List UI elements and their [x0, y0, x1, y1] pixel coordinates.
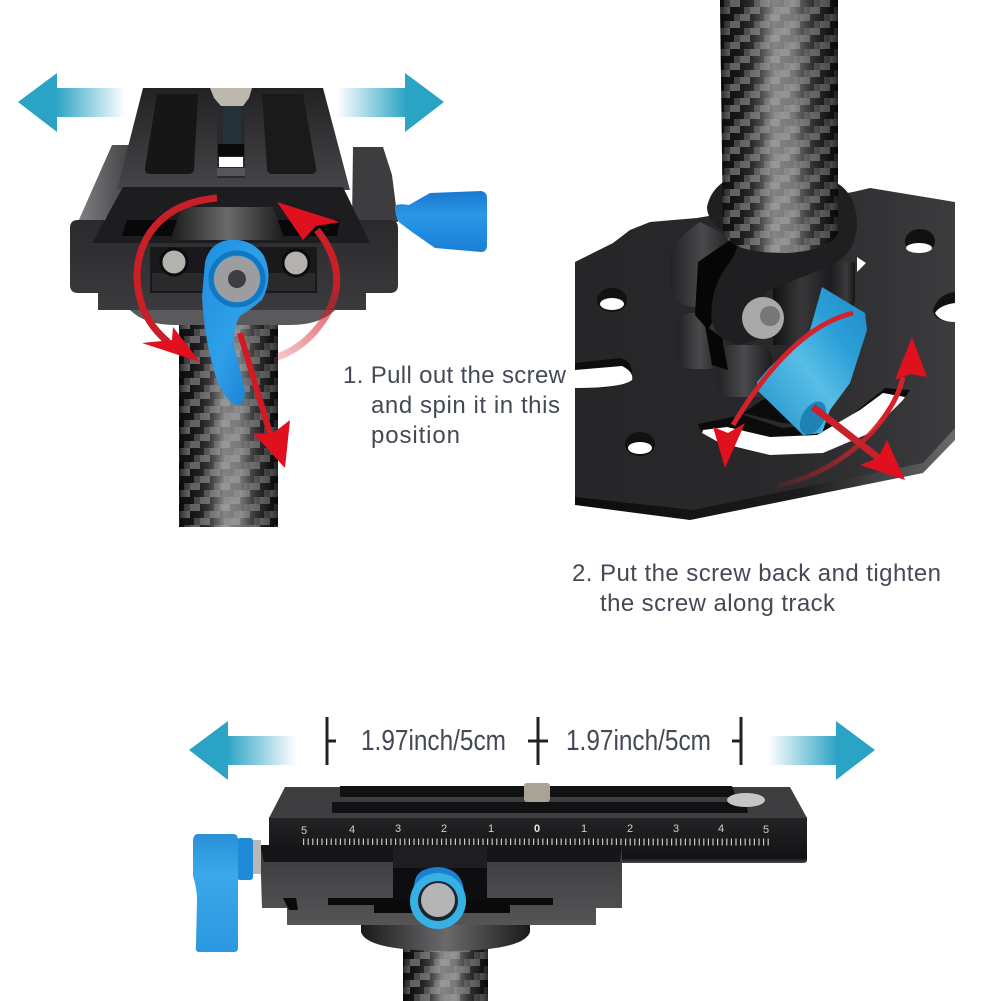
text: step 2: 2. Put the screw back and tighten	[572, 560, 941, 587]
rubber strips	[332, 786, 748, 813]
side blue lever	[193, 834, 261, 952]
blue lever	[202, 240, 269, 405]
ruler scale: 0	[534, 823, 540, 835]
ruler scale: 1	[581, 823, 587, 835]
lever hex screw	[211, 253, 263, 305]
dimension label left: 1.97inch/5cm	[361, 725, 506, 757]
top plate	[117, 88, 350, 190]
knob threaded hole	[794, 397, 832, 439]
clamp base shadow	[130, 310, 335, 325]
hole left	[597, 288, 627, 312]
round base	[361, 925, 530, 951]
blue wing knob	[757, 287, 867, 435]
hole lower left	[625, 432, 655, 456]
plate holes	[575, 229, 955, 456]
panel: slide range dimension	[189, 717, 875, 780]
ruler scale: 2	[627, 823, 633, 835]
text: step 1	[343, 362, 567, 449]
text: step 1: and spin it in this	[371, 392, 560, 419]
carbon fibre tube	[179, 310, 278, 527]
curved slot	[698, 388, 910, 455]
plate underside	[575, 425, 955, 520]
red rotation arrow	[733, 313, 903, 486]
ruler scale	[301, 823, 769, 837]
dimension label right: 1.97inch/5cm	[566, 725, 711, 757]
ruler scale: 1	[488, 823, 494, 835]
clamp collar	[707, 183, 857, 345]
text: step 2	[572, 560, 941, 617]
rubber pad left	[145, 94, 198, 174]
ruler scale: 5	[763, 824, 769, 836]
left side rail	[70, 145, 137, 240]
hole behind clamp	[857, 257, 866, 272]
round bolts	[161, 249, 309, 276]
ruler scale: 5	[301, 825, 307, 837]
clamp bolt	[742, 297, 784, 339]
hole right edge	[933, 292, 955, 322]
lower clamp lobes	[677, 313, 772, 397]
text: step 2: the screw along track	[600, 590, 836, 617]
mounting plate	[575, 188, 955, 510]
text: step 1: position	[371, 422, 460, 449]
inner block	[150, 247, 317, 293]
ruler scale: 3	[395, 823, 401, 835]
ruler scale: 4	[718, 823, 724, 835]
dovetail groove	[122, 220, 340, 236]
panel: step 1 quick release clamp, top view	[18, 73, 487, 527]
cyan arrow left	[18, 73, 125, 132]
left clamp lobe	[670, 222, 735, 307]
sliding plate	[269, 817, 807, 863]
gap lower	[705, 325, 728, 370]
carbon fibre tube	[720, 0, 838, 253]
clamp body	[70, 220, 398, 310]
carbon fibre tube	[403, 940, 488, 1001]
clamp cylinder	[773, 262, 855, 345]
panel: step 2 mounting plate	[575, 0, 955, 520]
front blue knob	[410, 867, 466, 929]
knob shadow	[743, 395, 810, 425]
right side rail	[352, 147, 398, 222]
straight slot	[575, 358, 632, 388]
ruler scale: 4	[349, 824, 355, 836]
clamp body	[260, 845, 622, 925]
cyan arrow left	[189, 721, 296, 780]
mounting screw	[210, 88, 252, 178]
red pull arrow	[813, 407, 905, 480]
red rotation arrow	[137, 198, 337, 357]
text: step 1: 1. Pull out the screw	[343, 362, 567, 389]
cyan arrow right	[768, 721, 875, 780]
clamp gap	[695, 238, 755, 330]
hole upper right	[905, 229, 935, 253]
end bolt	[727, 793, 765, 807]
centre screw	[524, 783, 550, 802]
blue knob right	[395, 191, 487, 252]
front wedge	[92, 187, 370, 243]
cyan arrow right	[337, 73, 444, 132]
rubber pad right	[262, 94, 316, 174]
panel: bottom sliding clamp, front view	[193, 783, 807, 1001]
ruler scale: 3	[673, 823, 679, 835]
red pull arrow	[240, 333, 290, 468]
ruler scale: 2	[441, 823, 447, 835]
centre ring	[170, 207, 285, 240]
dimension tick marks	[327, 717, 741, 765]
centre block	[393, 845, 487, 900]
